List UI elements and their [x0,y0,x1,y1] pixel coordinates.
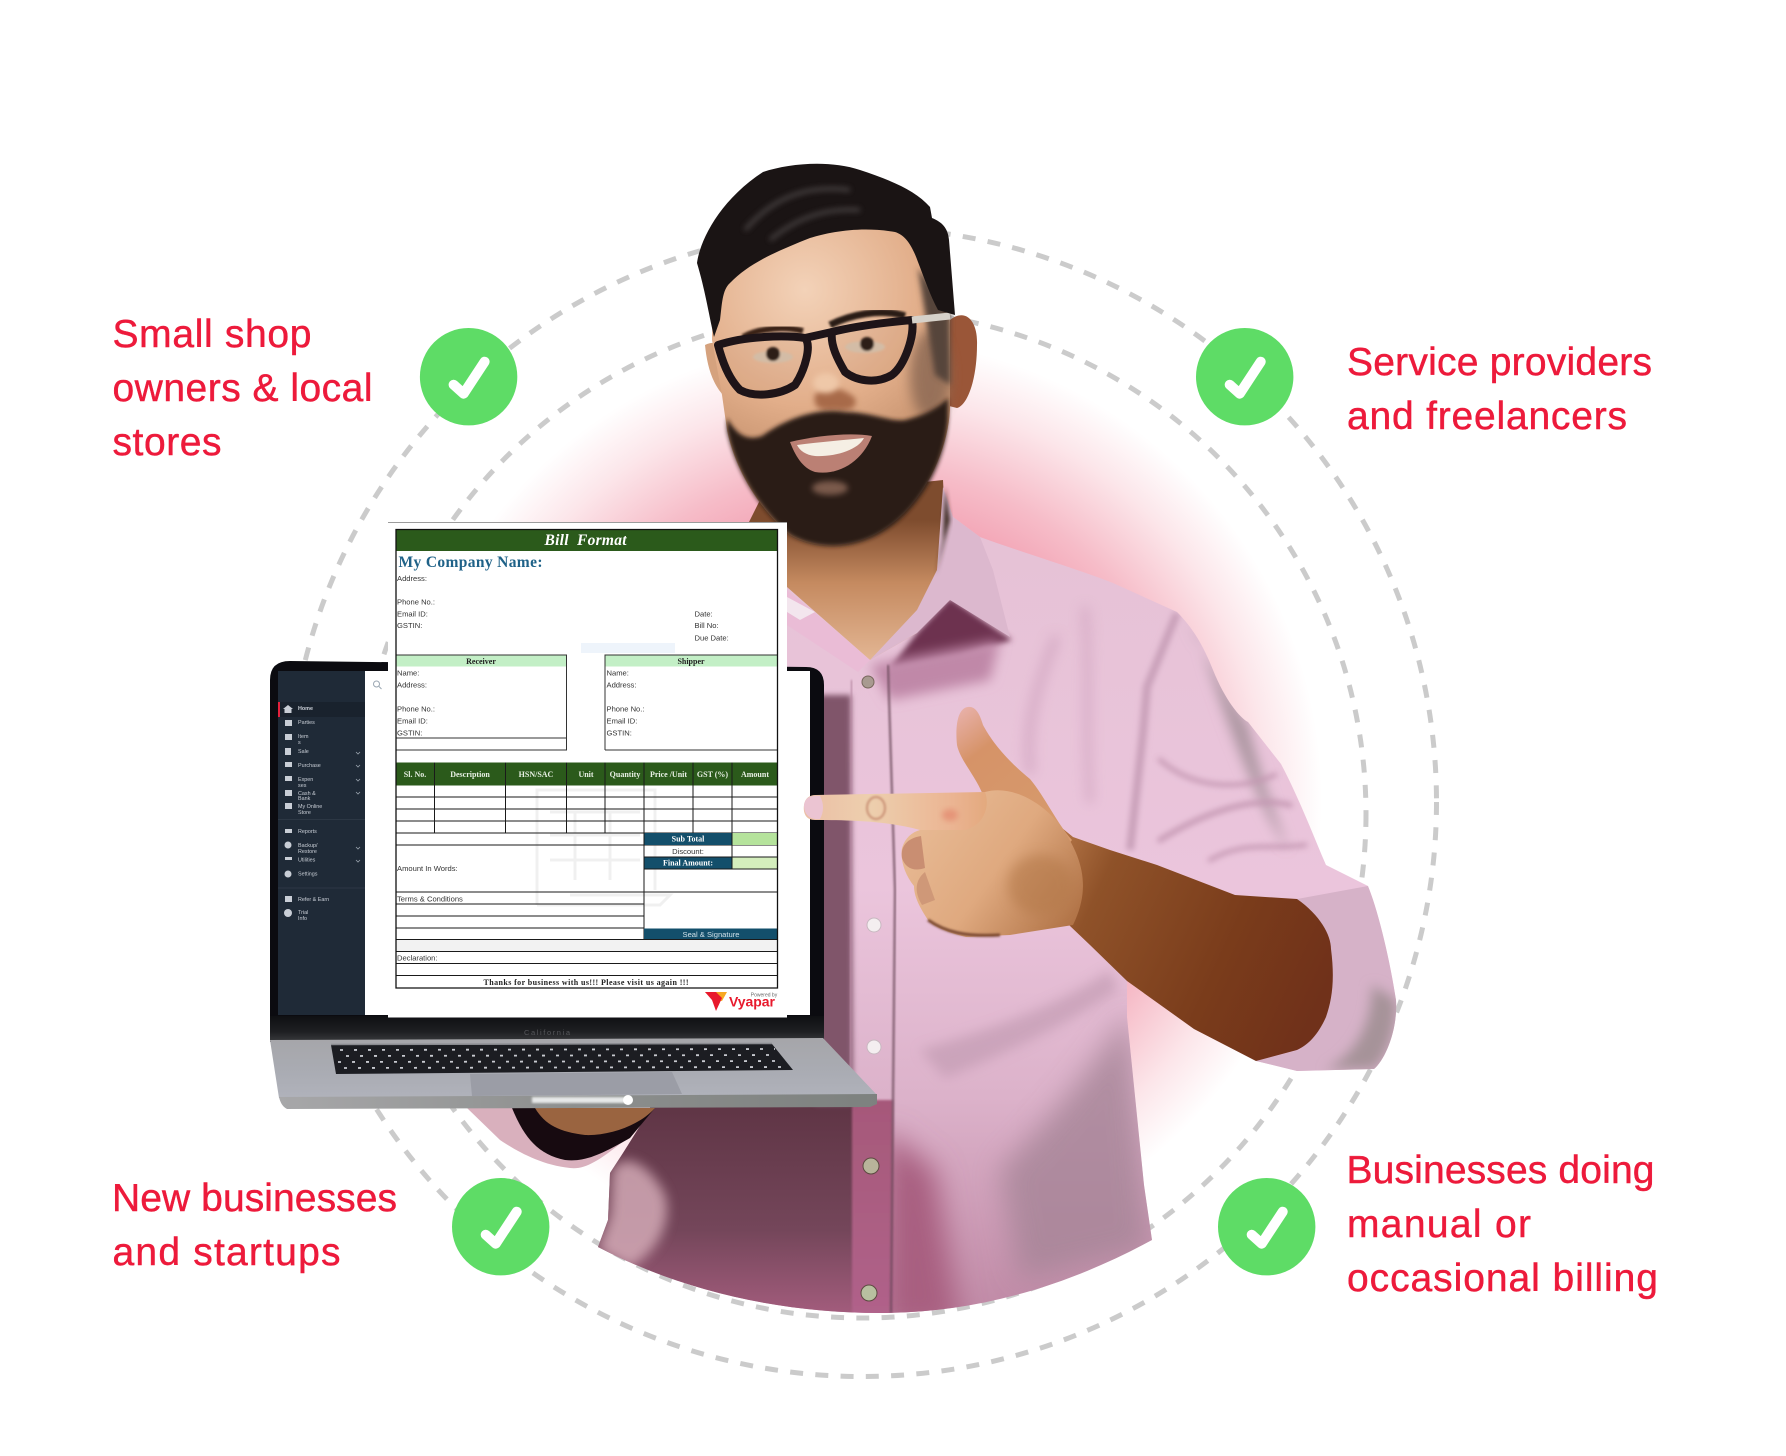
search icon [374,681,382,689]
nav labels: Restore [298,849,317,855]
label: manual billing: Businesses doing [1346,1149,1654,1192]
sleeve shading [1204,657,1286,840]
knuckle [867,797,885,819]
person: torso and shirt [590,480,1420,1330]
receiver box [396,655,566,750]
nav labels: s [298,740,301,746]
right ear [945,315,977,408]
base top [270,1038,877,1098]
shadow beside laptop [824,691,856,1073]
receiver box: Name: [397,668,419,678]
nav labels: My Online [298,804,322,810]
terms and signature: Amount In Words: [397,864,458,873]
totals: Final Amount: [663,858,713,868]
nav labels: Cash & [298,791,316,797]
shipper box: Shipper [677,657,705,666]
company details: Address: [397,574,427,583]
terms and signature [396,864,778,987]
chin patch [812,481,848,495]
items table [396,762,778,845]
totals: Sub Total [672,834,705,844]
base front [279,1094,877,1109]
pink background glow [398,338,1322,1262]
nav labels [298,706,329,922]
left hand under laptop [467,1108,655,1168]
nav labels: Purchase [298,763,321,769]
label: manual billing: manual or [1347,1203,1531,1246]
items table: Description [450,770,490,779]
items table: GST (%) [697,770,728,779]
nav chevrons [356,752,360,862]
check badge: bottom left [452,1178,549,1275]
nav labels: Sale [298,749,309,755]
check badge: top left [420,328,517,425]
nav labels: Parties [298,720,315,726]
sidebar [278,671,365,1015]
hair [697,164,955,337]
forearm [1020,810,1333,1061]
person: head [697,164,977,546]
receiver box: Email ID: [397,716,428,726]
vyapar logo: Vyapar [729,994,776,1010]
nav labels: ses [298,783,307,789]
beard [727,398,948,546]
glasses temple [912,316,950,320]
nav labels: Home [298,706,313,712]
receiver box: GSTIN: [397,728,422,738]
label: new businesses: and startups [112,1231,340,1274]
shipper box: Address: [606,680,636,690]
shirt body and sleeve [598,537,1396,1313]
nav labels: Expen [298,777,313,783]
front notch [532,1097,628,1103]
shipper box: Email ID: [606,716,637,726]
shadow right of placket [885,1130,960,1330]
label: small shop owners: stores [112,421,222,464]
items table: HSN/SAC [519,770,554,779]
trackpad [470,1072,682,1096]
lid bezel [270,661,824,1042]
receiver box: Receiver [466,657,496,666]
receiver box: Phone No.: [397,704,435,714]
curled fingers [902,836,925,870]
nav labels: Trial [298,910,308,916]
nav labels: Info [298,916,307,922]
nav icons [283,705,293,917]
title bar [396,530,778,551]
nose [814,388,856,410]
nav labels: Store [298,810,311,816]
company details: Phone No.: [397,598,435,606]
dashed rings [288,228,1436,1376]
chest folds [1029,610,1090,800]
shipper box [605,655,777,750]
company details: Due Date: [694,634,729,642]
laptop [270,661,877,1168]
label: manual billing [1346,1149,1658,1300]
nav labels: Utilities [298,858,316,864]
shipper box: Phone No.: [606,704,644,714]
face [712,200,950,545]
collar [870,487,1010,660]
items table: Unit [578,770,594,779]
check badge: top right [1196,328,1293,425]
keyboard [331,1044,793,1074]
lower right grey folds [1000,1010,1150,1280]
left ear [705,343,726,398]
cheek shadow [910,330,950,420]
label: small shop owners: owners & local [112,367,372,410]
neck [740,480,946,660]
watermark [537,790,670,905]
company details: Email ID: [397,610,428,618]
totals [644,833,778,940]
items table: Sl. No. [404,770,426,779]
company name: My Company Name: [398,554,542,571]
eyes [753,337,885,363]
shipper box: Name: [606,668,629,678]
hinge strip [270,1016,824,1042]
terms and signature: Terms & Conditions [397,894,463,904]
light patch of shirt lower left [598,1161,667,1268]
collar shadow [890,598,1012,668]
nav labels: Backup/ [298,843,318,849]
check badge: bottom right [1218,1178,1315,1275]
screen [365,671,810,1015]
label: service providers [1347,341,1652,438]
label: service providers: and freelancers [1347,395,1627,438]
nav labels: Item [298,734,309,740]
terms and signature: Thanks for business with us!!! Please visit us again !!! [484,978,688,987]
company details: Bill No: [694,621,719,630]
totals: Discount: [672,847,704,856]
label: manual billing: occasional billing [1347,1257,1658,1300]
company details: GSTIN: [397,621,422,630]
label: small shop owners: Small shop [112,313,312,356]
finger nail [804,796,823,819]
index finger [804,792,987,830]
placket line [888,665,895,1313]
buttons [861,676,881,1301]
items table: Amount [741,770,769,779]
mouth [790,434,872,473]
torso seam [1124,855,1130,985]
company details: Date: [694,610,713,618]
snip tooltip [581,643,675,653]
nav labels: Bank [298,796,311,802]
company details [397,574,729,642]
receiver box: Address: [397,680,427,690]
page [113,164,1656,1379]
items table: Price /Unit [650,770,687,779]
items table: Quantity [610,770,640,779]
vyapar logo [705,992,778,1011]
label: service providers: Service providers [1347,341,1652,384]
nav labels: Reports [298,829,317,835]
nav labels: Refer & Earn [298,897,329,903]
back of hand [902,790,1083,937]
lid brand text: California [524,1028,571,1037]
terms and signature: Declaration: [397,954,438,962]
bill format paper [388,522,787,1018]
terms and signature: Seal & Signature [682,930,740,939]
label: new businesses: New businesses [112,1177,397,1220]
shipper box: GSTIN: [606,728,632,738]
label: small shop owners [112,313,372,464]
hair highlights [745,189,860,240]
cuff [1256,886,1396,1071]
eyebrows [743,328,803,337]
title: Bill Format [544,532,627,549]
vyapar logo: Powered by [751,992,778,998]
label: new businesses [112,1177,397,1274]
placket lower [852,1100,893,1320]
lower shadow under laptop [590,1100,854,1320]
person: pointing arm and hand [804,707,1333,1061]
nav labels: Settings [298,872,318,878]
wrist shading [1008,855,1072,915]
bill border [396,530,778,988]
glasses [718,320,913,395]
thumb [956,707,1072,880]
